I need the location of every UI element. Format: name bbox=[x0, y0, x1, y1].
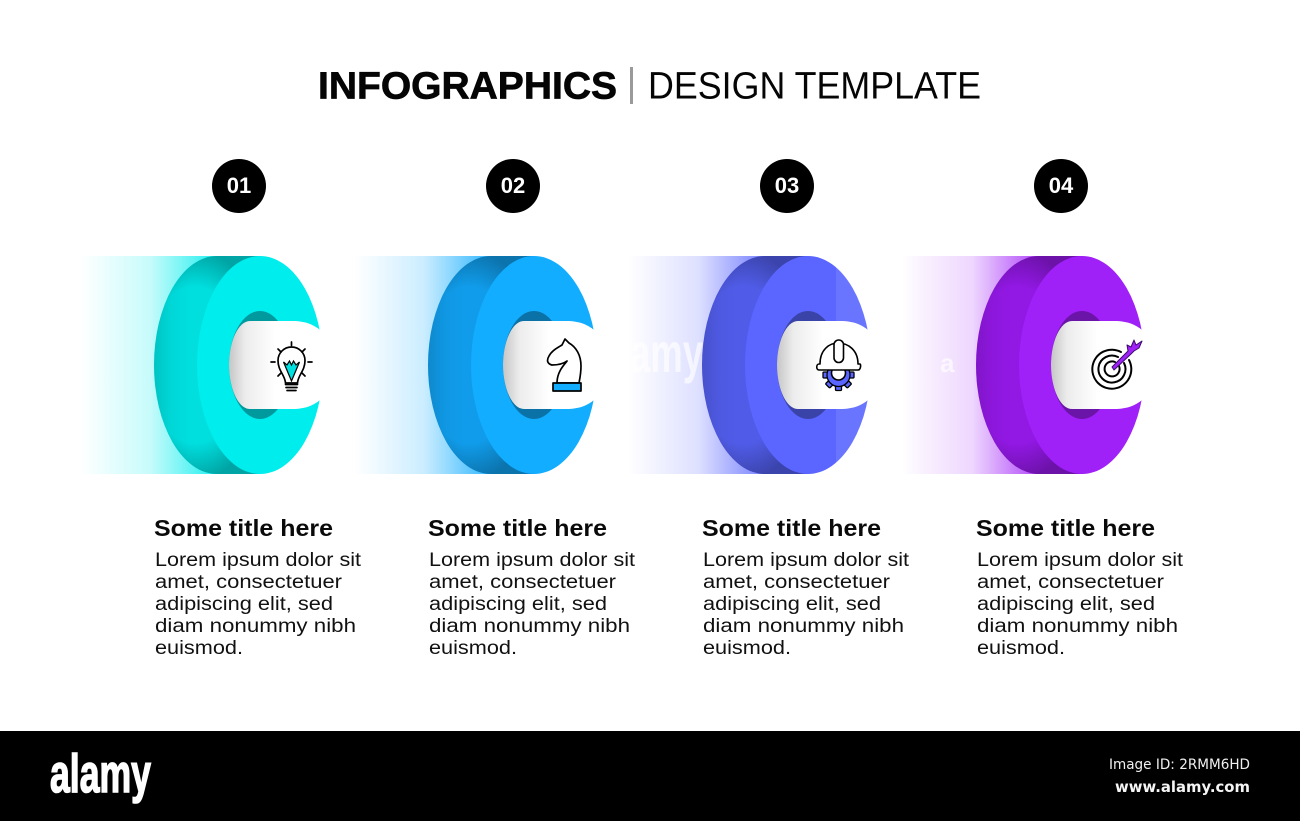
number badge 02: 02 bbox=[501, 173, 525, 198]
text block 1: diam nonummy nibh bbox=[155, 616, 356, 637]
text block 1: Lorem ipsum dolor sit bbox=[155, 550, 362, 571]
number badge 02 bbox=[486, 159, 540, 213]
text block 3: euismod. bbox=[703, 638, 791, 659]
step 3 bbox=[628, 159, 876, 480]
text block 2: Lorem ipsum dolor sit bbox=[429, 550, 636, 571]
text block 2 bbox=[428, 515, 636, 659]
number badge 04 bbox=[1034, 159, 1088, 213]
step 1 bbox=[80, 159, 328, 480]
step 4 bbox=[902, 159, 1150, 480]
text block 3: diam nonummy nibh bbox=[703, 616, 904, 637]
number badge 03: 03 bbox=[775, 173, 799, 198]
ring 4 bbox=[976, 250, 1150, 480]
icon: helmet with gear bbox=[817, 340, 861, 390]
text block 3: Lorem ipsum dolor sit bbox=[703, 550, 910, 571]
text block 3: amet, consectetuer bbox=[703, 572, 891, 593]
number badge 01: 01 bbox=[227, 173, 251, 198]
text block 1: adipiscing elit, sed bbox=[155, 594, 333, 615]
text block 2: diam nonummy nibh bbox=[429, 616, 630, 637]
title: DESIGN TEMPLATE bbox=[648, 66, 981, 108]
number badge 03 bbox=[760, 159, 814, 213]
text block 4: euismod. bbox=[977, 638, 1065, 659]
step 2 bbox=[354, 159, 602, 480]
ring 3 bbox=[702, 250, 876, 480]
icon: chess knight bbox=[548, 339, 581, 391]
text block 1 bbox=[154, 515, 362, 659]
text block 3: Some title here bbox=[702, 515, 881, 541]
text block 3 bbox=[702, 515, 910, 659]
fade trail 2 bbox=[354, 256, 494, 474]
text block 4: Some title here bbox=[976, 515, 1155, 541]
text block 2: euismod. bbox=[429, 638, 517, 659]
text block 4: adipiscing elit, sed bbox=[977, 594, 1155, 615]
text block 4: Lorem ipsum dolor sit bbox=[977, 550, 1184, 571]
fade trail 4 bbox=[902, 256, 1042, 474]
text block 2: amet, consectetuer bbox=[429, 572, 617, 593]
footer logo: alamy bbox=[50, 744, 151, 804]
text block 2: adipiscing elit, sed bbox=[429, 594, 607, 615]
title: INFOGRAPHICS bbox=[318, 66, 617, 108]
text block 3: adipiscing elit, sed bbox=[703, 594, 881, 615]
footer bar bbox=[0, 731, 1300, 821]
watermark letter: a bbox=[940, 348, 955, 378]
ring 2 bbox=[428, 250, 602, 480]
text block 1: euismod. bbox=[155, 638, 243, 659]
icon: target with arrow bbox=[1092, 340, 1142, 389]
image id: Image ID: 2RMM6HD bbox=[1109, 757, 1250, 773]
fade trail 3 bbox=[628, 256, 768, 474]
icon: light bulb bbox=[271, 342, 312, 390]
number badge 04: 04 bbox=[1049, 173, 1074, 198]
website: www.alamy.com bbox=[1115, 778, 1250, 796]
text block 1: amet, consectetuer bbox=[155, 572, 343, 593]
title bbox=[318, 66, 981, 108]
text block 4: diam nonummy nibh bbox=[977, 616, 1178, 637]
watermark text: amy bbox=[630, 321, 703, 384]
text block 1: Some title here bbox=[154, 515, 333, 541]
text block 4: amet, consectetuer bbox=[977, 572, 1165, 593]
fade trail 1 bbox=[80, 256, 220, 474]
ring 1 bbox=[154, 250, 328, 480]
number badge 01 bbox=[212, 159, 266, 213]
text block 4 bbox=[976, 515, 1184, 659]
text block 2: Some title here bbox=[428, 515, 607, 541]
